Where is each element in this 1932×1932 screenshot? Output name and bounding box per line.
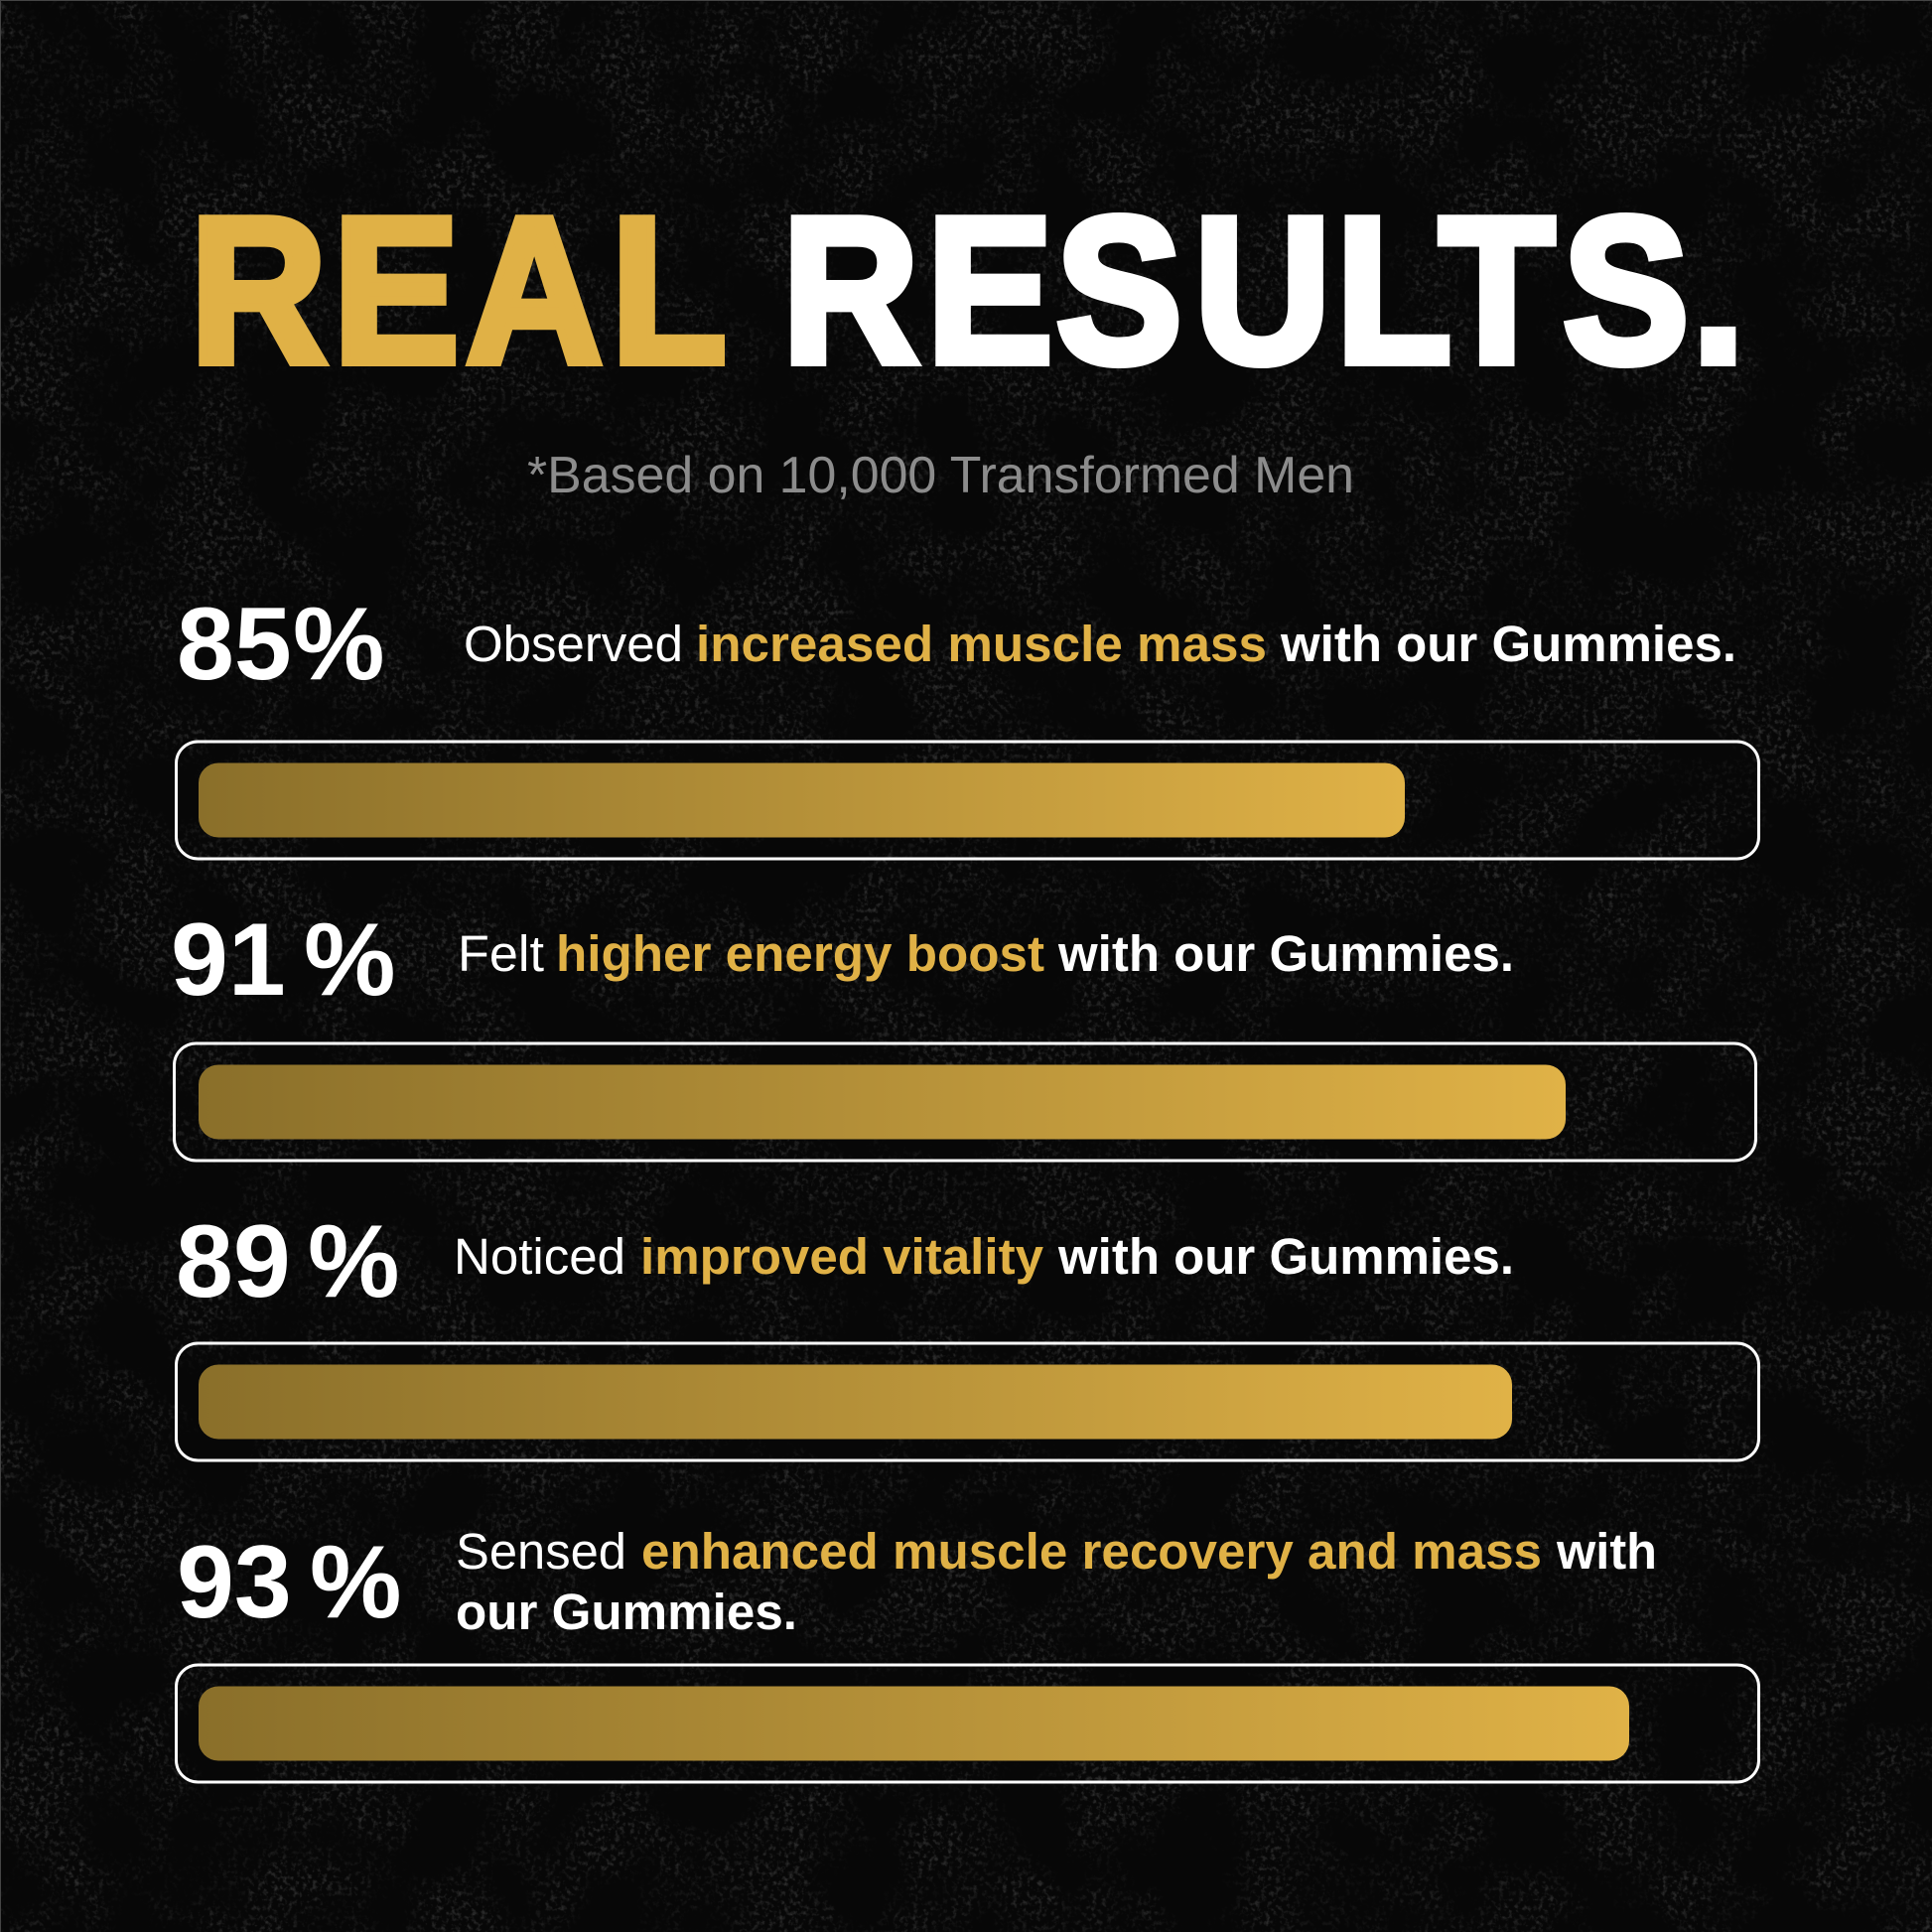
progress bar: 91% xyxy=(175,1043,1755,1161)
progress bar: 93% xyxy=(177,1665,1759,1782)
bar fill xyxy=(199,762,1405,838)
progress bar: 85% xyxy=(177,742,1759,859)
title xyxy=(191,175,1744,406)
row 2: higher energy boost xyxy=(171,902,1755,1161)
percentage: 91%: % xyxy=(304,902,395,1018)
row 1: increased muscle mass xyxy=(177,587,1759,859)
percentage: 85%: % xyxy=(293,587,384,702)
statement: row 4: our Gummies. xyxy=(456,1584,797,1640)
percentage: 85%: 85 xyxy=(177,587,292,702)
statement: row 3 xyxy=(454,1228,1514,1285)
title word: REAL: REAL xyxy=(191,175,727,406)
bar track xyxy=(177,1665,1759,1782)
title word: RESULTS.: RESULTS. xyxy=(782,175,1744,406)
statement: row 1: Observed xyxy=(464,616,683,672)
statement: row 2: higher energy boost xyxy=(556,925,1044,982)
statement: row 4: with xyxy=(1556,1523,1657,1580)
statement: row 4: enhanced muscle recovery and mass xyxy=(641,1523,1542,1580)
statement: row 4 xyxy=(456,1523,1657,1640)
statement: row 3: Noticed xyxy=(454,1228,625,1285)
bar track xyxy=(175,1043,1755,1161)
percentage: 93%: % xyxy=(310,1525,401,1640)
percentage: 85% xyxy=(177,587,384,702)
bar track xyxy=(177,1343,1759,1460)
percentage: 89% xyxy=(176,1204,399,1319)
bar track xyxy=(177,742,1759,859)
bar fill xyxy=(199,1064,1566,1140)
percentage: 91%: 91 xyxy=(171,902,286,1018)
percentage: 89%: 89 xyxy=(176,1204,291,1319)
statement: row 1: increased muscle mass xyxy=(696,616,1267,672)
statement: row 4: Sensed xyxy=(456,1523,626,1580)
percentage: 89%: % xyxy=(308,1204,399,1319)
statement: row 1: with our Gummies. xyxy=(1280,616,1736,672)
percentage: 91% xyxy=(171,902,395,1018)
statement: row 2: Felt xyxy=(458,925,544,982)
row 4: enhanced muscle recovery and mass xyxy=(177,1523,1759,1782)
statement: row 2 xyxy=(458,925,1514,982)
statement: row 3: with our Gummies. xyxy=(1057,1228,1514,1285)
progress bar: 89% xyxy=(177,1343,1759,1460)
percentage: 93% xyxy=(177,1525,401,1640)
statement: row 1 xyxy=(464,616,1736,672)
subtitle: *Based on 10,000 Transformed Men xyxy=(527,447,1354,504)
statement: row 2: with our Gummies. xyxy=(1057,925,1514,982)
bar fill xyxy=(199,1364,1512,1440)
row 3: improved vitality xyxy=(176,1204,1759,1460)
percentage: 93%: 93 xyxy=(177,1525,292,1640)
bar fill xyxy=(199,1686,1629,1761)
statement: row 3: improved vitality xyxy=(640,1228,1044,1285)
